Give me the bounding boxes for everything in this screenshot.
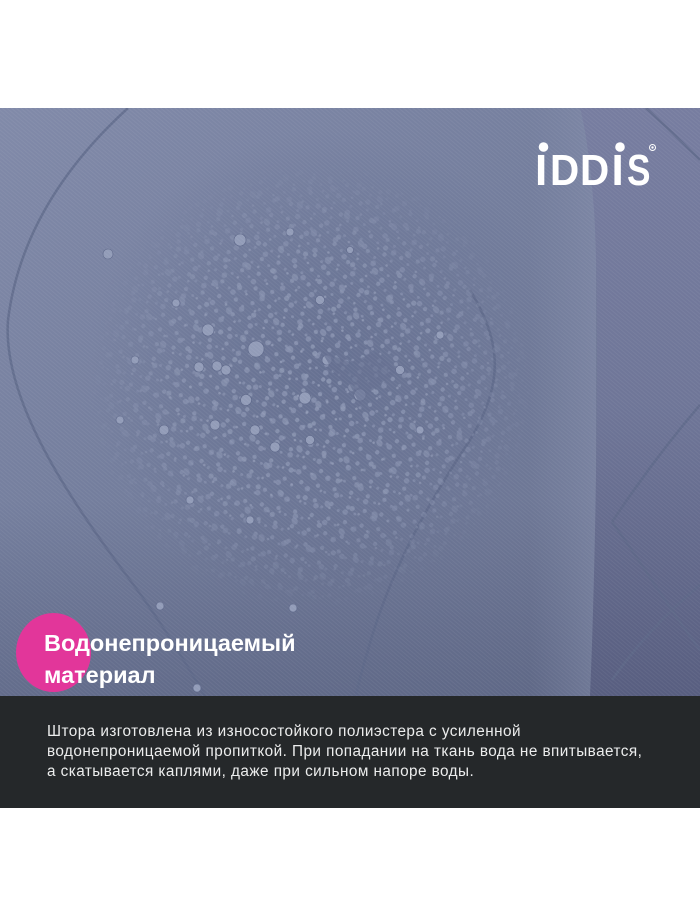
logo: IDDIS bbox=[535, 142, 656, 195]
right curtain panel bbox=[580, 108, 700, 696]
heading: Водонепроницаемый bbox=[44, 630, 296, 656]
weave texture bbox=[0, 108, 700, 696]
logo wordmark: D bbox=[580, 145, 609, 194]
logo wordmark: I bbox=[535, 146, 547, 195]
fabric background bbox=[0, 108, 700, 696]
logo wordmark: D bbox=[550, 145, 579, 194]
logo wordmark bbox=[535, 145, 650, 195]
large water droplets bbox=[103, 228, 444, 692]
photo: grey-blue fabric with water droplets bbox=[0, 108, 700, 696]
logo wordmark: S bbox=[627, 146, 650, 195]
darker run of water at centre bbox=[322, 352, 396, 405]
logo dots bbox=[539, 142, 625, 152]
heading bbox=[44, 630, 296, 688]
logo wordmark: I bbox=[612, 146, 624, 195]
description text: Штора изготовлена из износостойкого полиэстера с усиленной bbox=[47, 723, 521, 740]
logo registered mark bbox=[650, 144, 656, 150]
water droplets field bbox=[120, 200, 505, 580]
seam curves bbox=[8, 108, 700, 696]
description text: а скатывается каплями, даже при сильном напоре воды. bbox=[47, 763, 474, 780]
heading: материал bbox=[44, 662, 156, 688]
description text: водонепроницаемой пропиткой. При попадании на ткань вода не впитывается, bbox=[47, 743, 642, 760]
dark description band bbox=[0, 696, 700, 808]
fold highlight bbox=[530, 108, 596, 696]
pink circle accent bbox=[16, 613, 91, 692]
description text bbox=[47, 723, 642, 780]
